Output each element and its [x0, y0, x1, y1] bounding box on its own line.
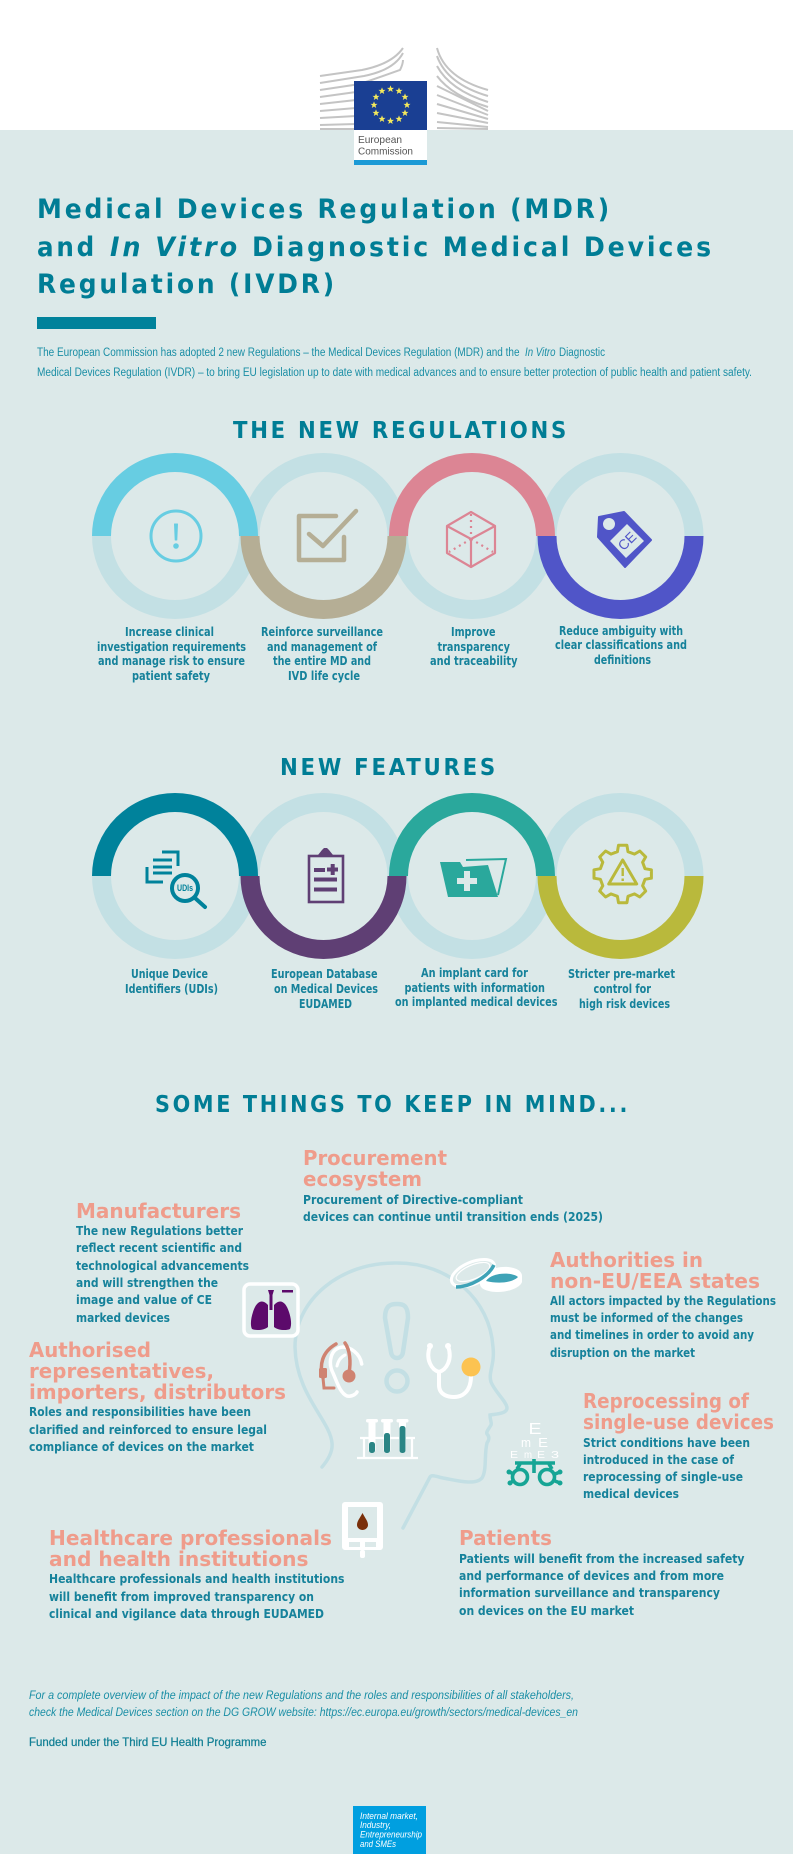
icon: UDI documents and magnifier	[147, 852, 205, 907]
footer note: For a complete overview of the impact of the new Regulations and the roles and responsibilities of all stakeholders,	[29, 1690, 574, 1702]
caption 3: patients with information	[404, 980, 545, 995]
ring 2 tan	[250, 536, 397, 610]
block: reprocessing of single-use devices: Strict conditions have been	[583, 1435, 750, 1450]
block: authorities in non-EU/EEA states: and timelines in order to avoid any	[550, 1327, 754, 1342]
DG badge	[353, 1806, 426, 1854]
caption 3: on implanted medical devices	[395, 994, 558, 1009]
logo caption box: European	[358, 134, 402, 146]
caption 2: IVD life cycle	[288, 668, 360, 683]
caption 1	[125, 966, 218, 996]
caption 3: and traceability	[430, 653, 518, 668]
block: reprocessing of single-use devices: Reprocessing of	[583, 1389, 750, 1413]
EU flag	[354, 81, 427, 130]
icon: eye chart and trial frame: m	[524, 1450, 532, 1461]
icon: cube	[447, 512, 495, 567]
block: healthcare professionals: Healthcare professionals	[49, 1526, 332, 1550]
building right wing	[437, 48, 488, 129]
central head illustration	[244, 1254, 562, 1558]
block: manufacturers: image and value of CE	[76, 1292, 212, 1307]
block: procurement ecosystem: Procurement	[303, 1146, 447, 1170]
ring 3 pink	[398, 462, 546, 536]
caption 3: transparency	[438, 639, 510, 654]
icon: UDI documents and magnifier: UDIs	[177, 883, 193, 893]
icon: CE tag: CE	[614, 528, 640, 554]
icon: check box	[299, 511, 356, 560]
block: healthcare professionals: will benefit from improved transparency on	[49, 1589, 314, 1604]
block: authorised representatives: Authorised	[29, 1338, 151, 1362]
icon: petri dishes	[448, 1254, 522, 1292]
logo caption box: Commission	[358, 146, 413, 158]
icon: exclamation circle	[151, 511, 201, 561]
icon: hearing aid	[319, 1343, 362, 1396]
caption 1: Unique Device	[131, 966, 208, 981]
block: healthcare professionals: and health institutions	[49, 1547, 308, 1571]
icon: eye chart and trial frame: E	[538, 1435, 548, 1450]
block: patients: and performance of devices and from more	[459, 1568, 724, 1583]
intro text: The European Commission has adopted 2 new Regulations – the Medical Devices Regulation (MDR) and the	[37, 347, 520, 359]
DG badge: Entrepreneurship	[360, 1830, 422, 1840]
title	[37, 194, 714, 300]
logo caption box	[354, 130, 427, 165]
caption 2: EUDAMED	[299, 996, 352, 1011]
ring 3 green teal	[398, 802, 546, 876]
head outline	[295, 1263, 507, 1528]
block: patients: on devices on the EU market	[459, 1603, 634, 1618]
ring 2 purple	[250, 876, 397, 950]
big exclamation mark	[385, 1304, 408, 1392]
icon: implant card folder	[440, 859, 506, 897]
DG badge: Industry,	[360, 1820, 391, 1831]
caption 4: control for	[594, 981, 652, 996]
title: Medical Devices Regulation (MDR)	[37, 194, 612, 225]
block: manufacturers	[76, 1199, 249, 1325]
caption 3	[395, 965, 558, 1009]
ring 4 olive	[547, 876, 694, 950]
caption 2	[261, 624, 383, 683]
block: procurement ecosystem: ecosystem	[303, 1167, 422, 1191]
title: Diagnostic Medical Devices	[252, 232, 714, 263]
block: authorised representatives: compliance of devices on the market	[29, 1439, 254, 1454]
footer note: check the Medical Devices section on the DG GROW website: https://ec.europa.eu/growth/sectors/medical-devices_en	[29, 1707, 578, 1719]
building left wing	[320, 48, 403, 129]
block: authorised representatives: clarified and reinforced to ensure legal	[29, 1422, 267, 1437]
block: reprocessing of single-use devices	[583, 1389, 774, 1501]
block: procurement ecosystem	[303, 1146, 603, 1224]
caption 1: and manage risk to ensure	[98, 653, 245, 668]
panel: new features rings	[102, 802, 694, 1011]
DG badge: Internal market,	[360, 1811, 418, 1822]
pale ring halves	[102, 802, 694, 950]
panel: new regulations rings	[97, 462, 694, 683]
caption 4: Stricter pre-market	[568, 966, 675, 981]
caption 4: Reduce ambiguity with	[559, 623, 683, 638]
caption 1	[97, 624, 246, 683]
block: healthcare professionals: clinical and vigilance data through EUDAMED	[49, 1606, 324, 1621]
icon: stethoscope	[427, 1343, 480, 1397]
block: patients	[459, 1526, 744, 1618]
block: authorities in non-EU/EEA states	[550, 1248, 776, 1360]
block: healthcare professionals: Healthcare professionals and health institutions	[49, 1571, 344, 1586]
icon: eye chart and trial frame	[506, 1421, 562, 1486]
logo: European Commission	[320, 48, 488, 165]
block: authorised representatives: Roles and responsibilities have been	[29, 1404, 251, 1419]
icon: eye chart and trial frame: E	[528, 1421, 542, 1438]
icon: eye chart and trial frame: E	[510, 1450, 518, 1461]
title rule	[37, 317, 156, 329]
ring 1 cyan	[102, 462, 248, 536]
caption 2	[271, 966, 378, 1011]
caption 1: patient safety	[132, 668, 210, 683]
heading: new features: NEW FEATURES	[280, 753, 498, 781]
icon: test tubes	[357, 1419, 418, 1458]
block: authorised representatives: importers, distributors	[29, 1380, 286, 1404]
icon: lungs	[244, 1284, 298, 1336]
block: patients: information surveillance and transparency	[459, 1585, 720, 1600]
block: procurement ecosystem: Procurement of Directive-compliant	[303, 1192, 523, 1207]
block: authorities in non-EU/EEA states: non-EU/EEA states	[550, 1269, 760, 1293]
caption 1: Identifiers (UDIs)	[125, 981, 218, 996]
title: Regulation (IVDR)	[37, 269, 337, 300]
ring 1 teal blue	[102, 802, 248, 876]
block: reprocessing of single-use devices: single-use devices	[583, 1410, 774, 1434]
caption 1: investigation requirements	[97, 639, 246, 654]
block: manufacturers: and will strengthen the	[76, 1275, 218, 1290]
caption 3	[430, 624, 518, 668]
block: reprocessing of single-use devices: introduced in the case of	[583, 1452, 734, 1467]
icon: eye chart and trial frame: 3	[551, 1450, 560, 1461]
caption 2: the entire MD and	[273, 653, 371, 668]
icon: gear with warning	[594, 845, 651, 903]
caption 2: Reinforce surveillance	[261, 624, 383, 639]
caption 3: Improve	[451, 624, 496, 639]
block: patients: Patients	[459, 1526, 552, 1550]
caption 3: An implant card for	[421, 965, 529, 980]
block: authorities in non-EU/EEA states: Authorities in	[550, 1248, 703, 1272]
footer note	[29, 1690, 578, 1719]
block: authorised representatives: representatives,	[29, 1359, 214, 1383]
block: patients: Patients will benefit from the increased safety	[459, 1551, 744, 1566]
caption 4	[568, 966, 675, 1011]
intro text	[37, 347, 752, 379]
pale ring halves	[102, 462, 694, 610]
heading: some things to keep in mind: SOME THINGS TO KEEP IN MIND...	[155, 1090, 630, 1118]
icon: CE tag	[598, 512, 651, 567]
intro text: In Vitro	[525, 347, 556, 359]
caption 4: definitions	[594, 652, 651, 667]
block: manufacturers: The new Regulations better	[76, 1223, 244, 1238]
icon: glucose meter	[342, 1502, 383, 1558]
ring 4 indigo	[547, 536, 694, 610]
block: reprocessing of single-use devices: medical devices	[583, 1486, 679, 1501]
block: manufacturers: Manufacturers	[76, 1199, 241, 1223]
icon: eye chart and trial frame: E	[537, 1450, 545, 1461]
caption 2: European Database	[271, 966, 378, 981]
block: reprocessing of single-use devices: reprocessing of single-use	[583, 1469, 743, 1484]
DG badge: and SMEs	[360, 1839, 396, 1850]
title: and	[37, 232, 97, 263]
caption 2: on Medical Devices	[274, 981, 378, 996]
block: authorities in non-EU/EEA states: must be informed of the changes	[550, 1310, 743, 1325]
block: manufacturers: reflect recent scientific and	[76, 1240, 242, 1255]
block: healthcare professionals	[49, 1526, 344, 1621]
block: manufacturers: technological advancements	[76, 1258, 249, 1273]
funding line: Funded under the Third EU Health Programme	[29, 1735, 267, 1749]
block: authorities in non-EU/EEA states: disruption on the market	[550, 1345, 695, 1360]
title: In Vitro	[110, 232, 240, 263]
heading: the new regulations: THE NEW REGULATIONS	[233, 416, 569, 444]
block: manufacturers: marked devices	[76, 1310, 170, 1325]
icon: eye chart and trial frame: m	[521, 1435, 531, 1450]
intro text: Diagnostic	[559, 347, 605, 359]
caption 4: high risk devices	[579, 996, 670, 1011]
caption 1: Increase clinical	[125, 624, 214, 639]
icon: clipboard	[309, 848, 343, 902]
caption 2: and management of	[267, 639, 377, 654]
caption 4	[555, 623, 687, 667]
block: procurement ecosystem: devices can continue until transition ends (2025)	[303, 1209, 603, 1224]
block: authorised representatives	[29, 1338, 286, 1454]
caption 4: clear classifications and	[555, 637, 687, 652]
